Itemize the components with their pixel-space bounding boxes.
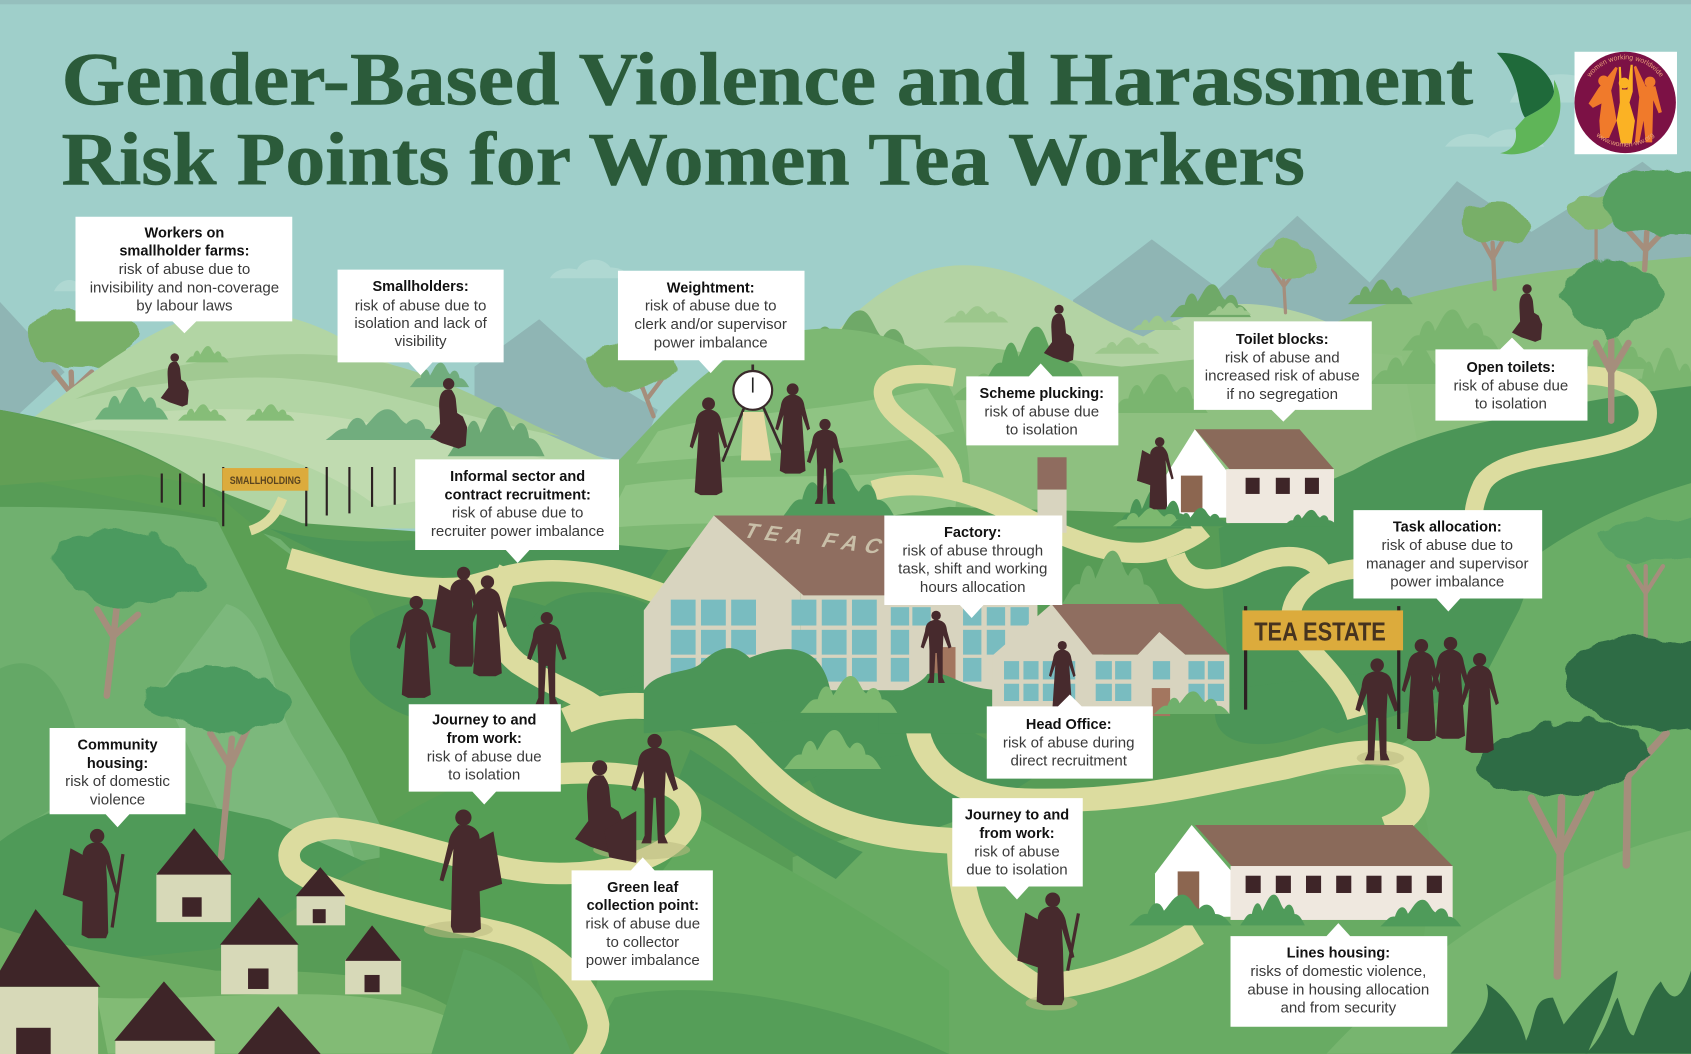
paths [250,374,1648,1054]
callout: toilet blocks: risk of abuse and [1225,349,1340,366]
callout: toilet blocks: increased risk of abuse [1205,368,1360,385]
callout: weightment: Weightment: [667,280,755,296]
callout: open toilets: to isolation [1475,396,1547,413]
callout: workers on smallholder farms: risk of abuse due to [119,261,250,278]
callout: informal sector: Informal sector and [450,469,585,485]
callout: factory: risk of abuse through [902,542,1043,559]
callout: informal sector: risk of abuse due to [452,505,583,522]
callout: green leaf collection point: power imbalance [586,952,700,969]
callout: informal sector: contract recruitment: [444,487,591,503]
callout: informal sector: recruiter power imbalance [431,523,604,540]
callout: lines housing: and from security [1281,1000,1397,1017]
title: Gender-Based Violence and Harassment [61,39,1473,122]
figures: journeys and housing [440,809,502,933]
chimney [1037,457,1067,533]
callout: journey to and from work (right) [952,798,1083,899]
callout: community housing: risk of domestic [65,773,170,790]
left hillside shapes [0,410,949,1054]
callout: smallholders: isolation and lack of [354,315,488,332]
callout: community housing: housing: [87,756,148,772]
callout: informal sector [415,459,619,563]
callout: smallholders: Smallholders: [372,279,469,295]
head office building [992,604,1229,717]
bush under scheme plucking figure [984,327,1086,384]
callout: workers on smallholder farms [75,217,292,333]
bushes in front of factory [644,648,1003,769]
callout: green leaf collection point: risk of abuse due [585,916,700,933]
callout: journey to and from work (right): risk of abuse [974,843,1060,860]
ground base layers [0,386,1691,1054]
dark green hollows [270,528,1402,879]
callout: head office [987,695,1153,779]
callout: journey to and from work (right): Journey to and [965,808,1069,824]
fence and smallholding sign [162,467,395,526]
tea estate sign: TEA ESTATE [1254,619,1386,647]
bushes around toilet block [1113,487,1337,528]
figure: toilet block [1137,437,1174,509]
title: Risk Points for Women Tea Workers [61,118,1305,201]
callout: weightment: clerk and/or supervisor [634,316,787,333]
callout: lines housing: Lines housing: [1287,946,1390,962]
figure: smallholder [430,378,467,449]
back bushes on far hills [787,280,1691,413]
back trees [585,170,1691,416]
callout: green leaf collection point: Green leaf [607,880,678,896]
callout: open toilets: Open toilets: [1466,360,1555,376]
figure: open toilets [1512,284,1542,342]
callout: workers on smallholder farms: smallholder farms: [119,244,249,260]
callout: journey to and from work (right): from work: [979,826,1055,842]
weighing scale [723,365,787,462]
callout: head office: Head Office: [1026,717,1112,733]
callout: smallholders: risk of abuse due to [355,298,486,315]
callout: scheme plucking: Scheme plucking: [980,386,1104,402]
centre striped hill [593,329,971,561]
figures: task allocation [1355,658,1399,760]
callout: journey to and from work (left): Journey to and [432,713,536,729]
callout: scheme plucking: risk of abuse due [984,403,1099,420]
callout: task allocation: risk of abuse due to [1381,537,1513,554]
figures: factory and office [921,611,951,683]
callout: smallholders: visibility [395,333,447,350]
callout: green leaf collection point: to collector [606,934,679,951]
logo: women worldwide [1574,52,1677,154]
callout: lines housing: risks of domestic violence, [1250,963,1426,980]
mountains [0,162,1691,464]
callout: factory: hours allocation [920,579,1026,596]
right-side trees [1472,262,1691,976]
callout: toilet blocks [1194,321,1372,422]
right foreground foliage [1451,971,1691,1054]
lines housing building [1129,825,1461,926]
callout: scheme plucking: to isolation [1006,422,1078,439]
callout: factory: Factory: [944,525,1001,541]
callout: journey to and from work (right): due to isolation [966,862,1068,879]
title [61,39,1473,201]
figure: scheme plucking [1044,305,1074,362]
callout: weightment [618,271,805,373]
tea estate sign [1242,606,1403,729]
callout: task allocation: Task allocation: [1393,520,1502,536]
callout: open toilets [1435,338,1587,421]
callout: head office: direct recruitment [1010,753,1128,770]
left mountain tree [29,308,138,434]
far hills [803,257,1691,669]
logo: leaf [1497,53,1560,154]
figure: smallholder farm worker [161,353,189,407]
callout: task allocation: manager and supervisor [1366,555,1529,572]
clouds [54,74,1585,315]
callout: workers on smallholder farms: by labour laws [136,298,233,315]
callout: toilet blocks: if no segregation [1227,386,1338,403]
callout: green leaf collection point: collection point: [587,898,699,914]
factory building [644,516,1037,690]
callout: journey to and from work (left) [409,704,561,805]
callout: factory: task, shift and working [898,561,1047,578]
callout: open toilets: risk of abuse due [1453,377,1568,394]
figures: informal recruitment [397,596,436,698]
left pale striped hill [0,311,615,528]
figures: weighing [690,397,727,495]
callout: workers on smallholder farms: Workers on [145,225,224,241]
callout: factory [884,516,1062,618]
callout: task allocation: power imbalance [1390,574,1504,591]
callout: lines housing [1231,923,1447,1027]
callout: task allocation [1353,510,1542,611]
callout: head office: risk of abuse during [1003,734,1135,751]
callout: weightment: risk of abuse due to [645,298,776,315]
worker silhouettes [63,284,1542,1005]
ground shadows under figures [424,751,1404,1011]
callout: journey to and from work (left): risk of abuse due [427,748,542,765]
callout: lines housing: abuse in housing allocation [1247,981,1429,998]
callout: scheme plucking [966,363,1118,445]
toilet block building [1166,429,1334,523]
callout: community housing [50,728,185,827]
callout: workers on smallholder farms: invisibility and non-coverage [90,279,279,296]
callout: journey to and from work (left): to isolation [448,767,520,784]
callout: green leaf collection point [572,857,713,980]
lower-left trees [52,529,293,857]
fence and smallholding sign: SMALLHOLDING [230,475,301,487]
green bushes behind factory [782,468,1159,604]
logo: women worldwide: www.women-ww.org [1596,132,1654,147]
figures: green leaf collection [575,760,624,854]
community housing huts [0,828,401,1054]
callout: community housing: Community [78,738,158,754]
factory building: TEA FACTORY [740,519,983,570]
logo: women worldwide: women working worldwide [1587,54,1662,77]
callout: toilet blocks: Toilet blocks: [1236,332,1329,348]
callout: journey to and from work (left): from work: [447,731,522,747]
callout: community housing: violence [90,792,145,809]
callout: smallholders [338,270,504,375]
bushes on pale hill [95,346,545,456]
callout: weightment: power imbalance [654,334,768,351]
